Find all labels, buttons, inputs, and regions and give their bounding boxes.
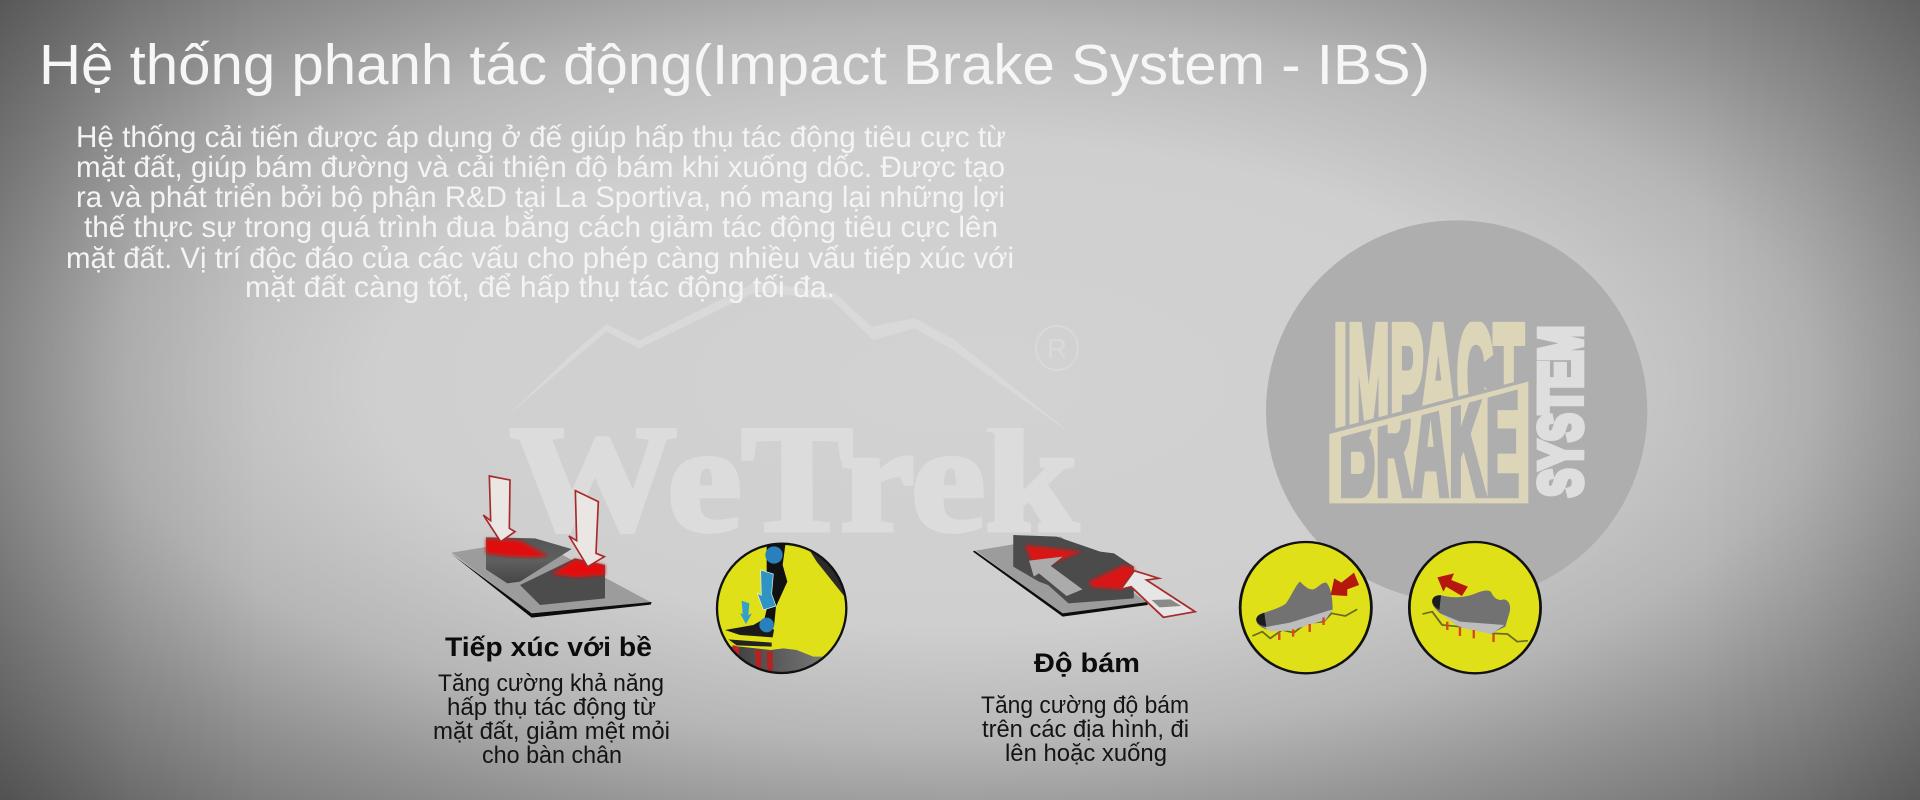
icon: grip blocks with arrows: [973, 535, 1195, 617]
intro paragraph: ra và phát triển bởi bộ phận R&D tại La Sportiva, nó mang lại những lợi: [76, 181, 1005, 214]
watermark: WeTrek logo: R: [1047, 333, 1067, 364]
badge: Impact Brake System logo: IMPACT: [1333, 294, 1524, 457]
description: cho bàn chân: [482, 742, 622, 769]
description: hấp thụ tác động từ: [447, 694, 656, 721]
intro paragraph: thế thực sự trong quá trình đua bằng cách giảm tác động tiêu cực lên: [84, 211, 998, 244]
description: [981, 692, 1189, 767]
panel: grip: [973, 535, 1541, 767]
intro paragraph: Hệ thống cải tiến được áp dụng ở đế giúp hấp thụ tác động tiêu cực từ: [76, 121, 1006, 154]
heading: Tiếp xúc với bề: [445, 632, 652, 662]
icon: leg absorbing impact: [716, 542, 848, 674]
description: mặt đất, giảm mệt mỏi: [433, 718, 670, 745]
badge: Impact Brake System logo: [1266, 220, 1647, 602]
badge: Impact Brake System logo: BRAKE: [1339, 357, 1519, 527]
heading: Độ bám: [1034, 648, 1140, 678]
watermark: WeTrek logo: WeTrek: [510, 395, 1079, 563]
badge: Impact Brake System logo: SYSTEM: [1527, 326, 1594, 497]
intro paragraph: mặt đất. Vị trí độc đáo của các vấu cho phép càng nhiều vấu tiếp xúc với: [66, 242, 1014, 275]
icon: shoe gripping downhill: [1240, 542, 1371, 673]
panel: surface contact: [433, 476, 850, 769]
watermark: WeTrek logo: [510, 282, 1080, 534]
icon: shoe gripping uphill: [1409, 542, 1541, 673]
description: lên hoặc xuống: [1005, 740, 1167, 767]
title: Hệ thống phanh tác động(Impact Brake System - IBS): [39, 33, 1430, 97]
icon: impact blocks with downward arrows: [451, 476, 652, 618]
intro paragraph: mặt đất càng tốt, để hấp thụ tác động tối đa.: [245, 271, 835, 304]
description: trên các địa hình, đi: [982, 716, 1189, 743]
intro paragraph: [66, 121, 1014, 304]
description: Tăng cường khả năng: [438, 670, 664, 697]
description: [433, 670, 670, 769]
description: Tăng cường độ bám: [981, 692, 1189, 719]
intro paragraph: mặt đất, giúp bám đường và cải thiện độ bám khi xuống dốc. Được tạo: [76, 151, 1005, 184]
